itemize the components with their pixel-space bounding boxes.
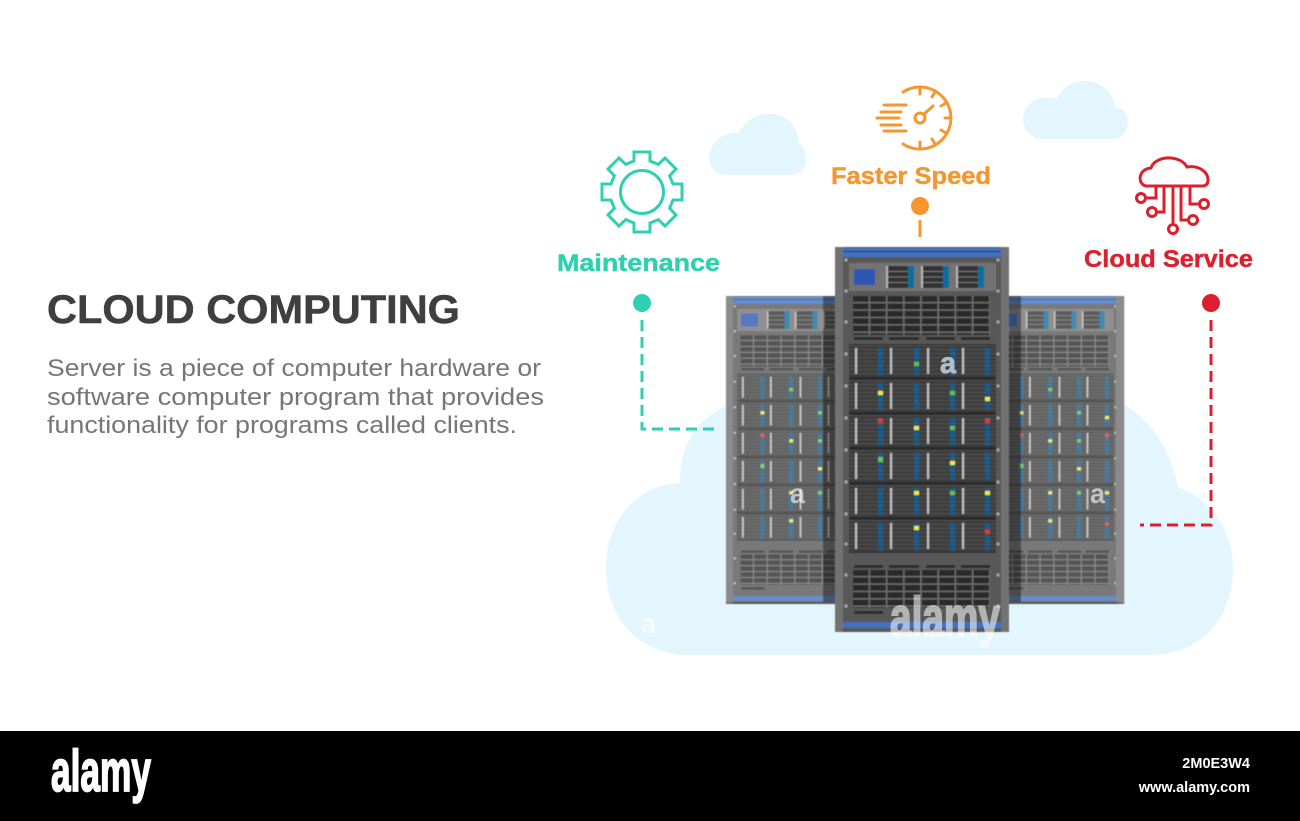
small cloud left — [709, 114, 806, 175]
connector: cloud service — [1140, 320, 1211, 525]
icon: cloud network — [1136, 158, 1208, 234]
server rack left — [726, 296, 865, 604]
icon: speedometer — [877, 87, 951, 149]
title: CLOUD COMPUTING — [47, 288, 460, 332]
connector: faster speed — [918, 220, 922, 237]
watermark glyphs: a — [790, 478, 805, 509]
footer logo: alamy — [51, 739, 151, 804]
description text — [47, 355, 544, 439]
dot: faster speed — [911, 197, 929, 215]
server rack center — [835, 247, 1009, 632]
watermark glyphs: a — [940, 347, 956, 380]
footer bar — [0, 731, 1300, 821]
dot: maintenance — [633, 294, 651, 312]
server rack right — [985, 296, 1124, 604]
description text: Server is a piece of computer hardware or — [47, 355, 541, 382]
large background cloud — [606, 402, 1233, 655]
label: cloud service: Cloud Service — [1084, 246, 1253, 273]
icon: gear — [602, 152, 682, 232]
watermark glyphs: a — [641, 608, 656, 639]
description text: software computer program that provides — [47, 384, 544, 411]
image id: 2M0E3W4 — [1182, 756, 1250, 772]
dot: cloud service — [1202, 294, 1220, 312]
connector: maintenance — [642, 320, 718, 429]
watermark glyphs: a — [1090, 478, 1105, 509]
site url: www.alamy.com — [1138, 780, 1250, 796]
label: faster speed: Faster Speed — [831, 163, 991, 190]
label: maintenance: Maintenance — [557, 250, 720, 277]
small cloud right — [1023, 81, 1128, 139]
watermark glyphs — [641, 347, 1105, 648]
watermark glyphs: alamy — [890, 585, 1000, 648]
description text: functionality for programs called clients. — [47, 412, 517, 439]
